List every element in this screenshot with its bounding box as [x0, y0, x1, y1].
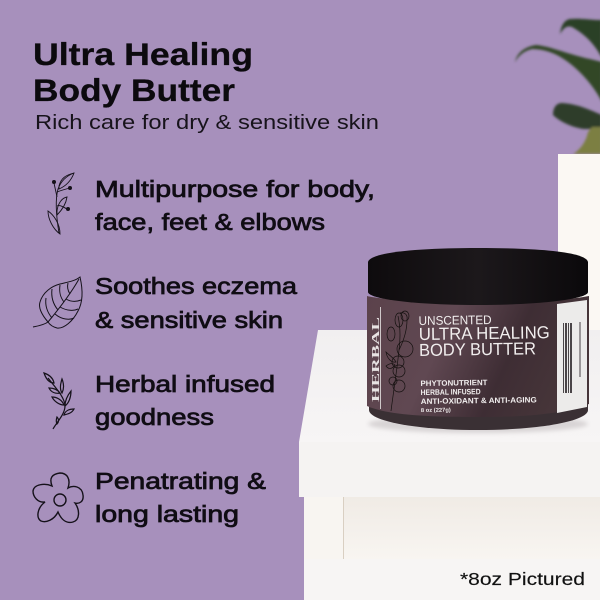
plant leaves: [515, 19, 600, 154]
feature text: soothes: Soothes eczema: [95, 273, 298, 299]
jar label: [367, 296, 589, 417]
label text: UNSCENTED: [418, 313, 492, 328]
label text: HERBAL INFUSED: [421, 387, 481, 397]
jar base: [369, 300, 588, 430]
brand name: HERBAL: [370, 317, 382, 402]
label text: ANTI-OXIDANT & ANTI-AGING: [421, 395, 537, 406]
shelf underside: [304, 497, 600, 559]
barcode strip: [557, 300, 587, 413]
feature text: penetrating: Penatrating &: [95, 468, 266, 494]
jar: [367, 248, 589, 433]
shelf front: [299, 442, 600, 497]
shelf: [299, 330, 600, 600]
title: Ultra Healing: [33, 36, 253, 72]
feature text: herbal: Herbal infused: [95, 371, 275, 397]
icon: flower: [33, 473, 83, 522]
label text: [418, 312, 551, 414]
icon: leaf: [33, 277, 82, 328]
icon: sprig: [48, 173, 74, 234]
feature text: soothes: & sensitive skin: [95, 307, 283, 333]
icon: herb branch: [44, 373, 74, 429]
label text: ULTRA HEALING: [419, 322, 550, 344]
feature text: soothes: [95, 273, 298, 333]
botanical label art: [386, 311, 413, 411]
feature text: herbal: goodness: [95, 404, 214, 430]
footnote: *8oz Pictured: [460, 569, 585, 589]
shelf lower panel: [304, 559, 600, 600]
subtitle: Rich care for dry & sensitive skin: [35, 112, 379, 134]
feature text: penetrating: [95, 468, 266, 527]
jar lid: [368, 248, 588, 305]
shelf top: [299, 330, 600, 442]
label text: PHYTONUTRIENT: [420, 378, 488, 388]
label text: 8 oz (227g): [421, 408, 451, 414]
title: Body Butter: [33, 72, 235, 108]
feature text: multipurpose: Multipurpose for body,: [95, 176, 375, 202]
title: [33, 36, 253, 108]
feature text: multipurpose: face, feet & elbows: [95, 209, 325, 235]
feature text: penetrating: long lasting: [95, 501, 239, 527]
label text: BODY BUTTER: [419, 338, 536, 360]
feature text: multipurpose: [95, 176, 375, 235]
feature text: herbal: [95, 371, 275, 430]
plant pot: [558, 154, 600, 334]
